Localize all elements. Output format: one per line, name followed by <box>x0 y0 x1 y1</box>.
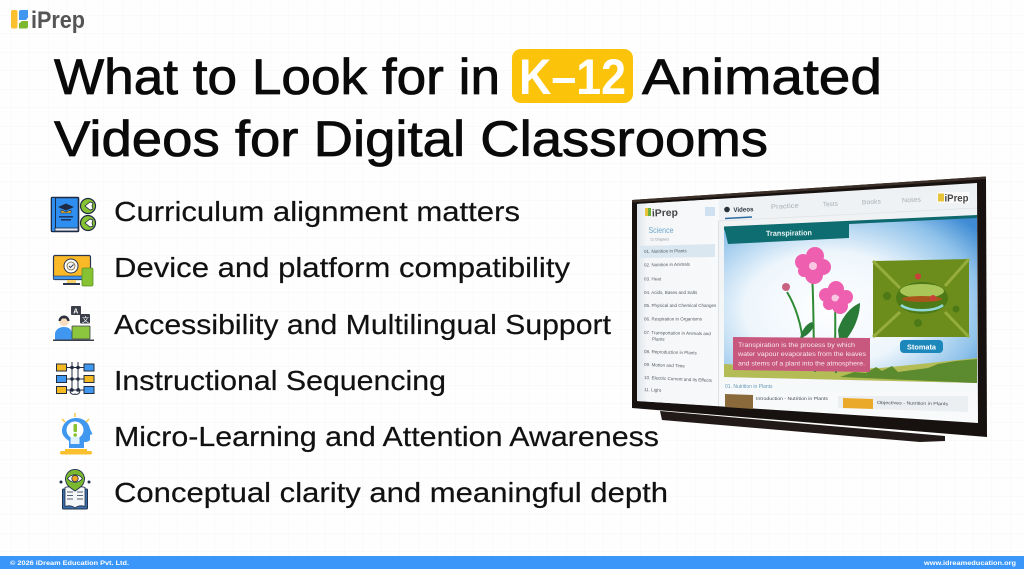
screen logo: iPrep <box>944 194 968 204</box>
screen header tabs: Books <box>862 198 882 206</box>
icon: multilingual support <box>53 306 94 341</box>
logo: iPrep: iPrep <box>31 7 85 34</box>
flower: lower pink <box>819 281 853 314</box>
screen logo <box>645 192 969 219</box>
caption: transpiration definition: and stems of a plant into the atmosphere. <box>738 360 865 368</box>
icon: multilingual support: 文 <box>82 315 89 324</box>
flower bud <box>782 283 790 291</box>
stomata close-up <box>873 259 969 337</box>
grass <box>724 358 977 383</box>
text: micro-learning: Micro-Learning and Attention Awareness <box>114 421 659 452</box>
chapter sidebar: Science <box>648 226 674 235</box>
screen <box>637 183 978 423</box>
heading banner: transpiration <box>724 222 849 244</box>
footer bar: www.idreameducation.org <box>923 560 1016 567</box>
caption: transpiration definition: water vapour evaporates from the leaves <box>737 351 867 358</box>
video list: 01. Nutrition in Plants <box>725 384 773 390</box>
highlight: K-12: K–12 <box>519 49 626 105</box>
text: curriculum alignment: Curriculum alignment matters <box>114 196 520 227</box>
stomata label: Stomata <box>907 344 936 352</box>
text: instructional sequencing: Instructional Sequencing <box>114 365 446 396</box>
heading banner: transpiration: Transpiration <box>766 228 812 238</box>
chapter sidebar: 03. Heat <box>644 276 662 281</box>
text: accessibility: Accessibility and Multilingual Support <box>114 309 611 340</box>
chapter sidebar: 09. Motion and Time <box>644 362 685 368</box>
chapter sidebar: 11. Light <box>644 387 662 393</box>
screen header tabs: Videos <box>733 206 754 214</box>
chapter sidebar: 04. Acids, Bases and Salts <box>644 290 698 295</box>
chapter sidebar: Plants <box>652 337 665 342</box>
text: device compatibility: Device and platform compatibility <box>114 252 570 283</box>
icon: micro-learning head <box>60 413 92 454</box>
chapter sidebar: 01. Nutrition in Plants <box>644 248 688 254</box>
flower: large pink <box>795 247 831 284</box>
chapter sidebar: 10. Electric Current and its Effects <box>644 375 713 383</box>
title: Animated <box>642 49 882 105</box>
chapter sidebar: 05. Physical and Chemical Changes <box>644 303 717 308</box>
icon: conceptual clarity <box>60 469 90 509</box>
screen header tabs <box>705 196 922 218</box>
logo: iPrep <box>11 7 85 34</box>
chapter sidebar: 06. Respiration in Organisms <box>644 316 703 322</box>
footer bar <box>0 556 1024 569</box>
video list: Introduction - Nutrition in Plants <box>756 396 829 401</box>
flower stems <box>787 275 836 373</box>
video list <box>725 384 968 412</box>
chapter sidebar: 08. Reproduction in Plants <box>644 349 698 355</box>
screen header tabs: Tests <box>823 201 839 208</box>
chapter sidebar: 12 Chapters <box>650 238 669 242</box>
icon: device compatibility <box>54 256 93 286</box>
title: Videos for Digital Classrooms <box>54 111 768 167</box>
video list: Objectives - Nutrition in Plants <box>877 400 949 406</box>
icon: curriculum book <box>52 198 96 232</box>
lesson animation <box>724 215 977 383</box>
title <box>54 49 882 167</box>
screen logo: iPrep <box>652 208 678 219</box>
text: conceptual clarity: Conceptual clarity and meaningful depth <box>114 477 668 508</box>
title: What to Look for in <box>54 49 500 105</box>
stomata label <box>900 340 943 353</box>
screen header tabs: Practice <box>771 203 800 211</box>
interactive display panel <box>632 176 987 442</box>
caption: transpiration definition <box>733 337 870 372</box>
icon: multilingual support: A <box>73 308 78 316</box>
chapter sidebar <box>640 226 717 393</box>
chapter sidebar: 07. Transportation in Animals and <box>644 330 711 336</box>
caption: transpiration definition: Transpiration is the process by which <box>738 342 855 349</box>
icon: instructional sequencing <box>56 362 94 394</box>
footer bar: © 2026 iDream Education Pvt. Ltd. <box>10 559 129 567</box>
screen header tabs: Notes <box>902 196 922 204</box>
chapter sidebar: 02. Nutrition in Animals <box>644 262 691 267</box>
